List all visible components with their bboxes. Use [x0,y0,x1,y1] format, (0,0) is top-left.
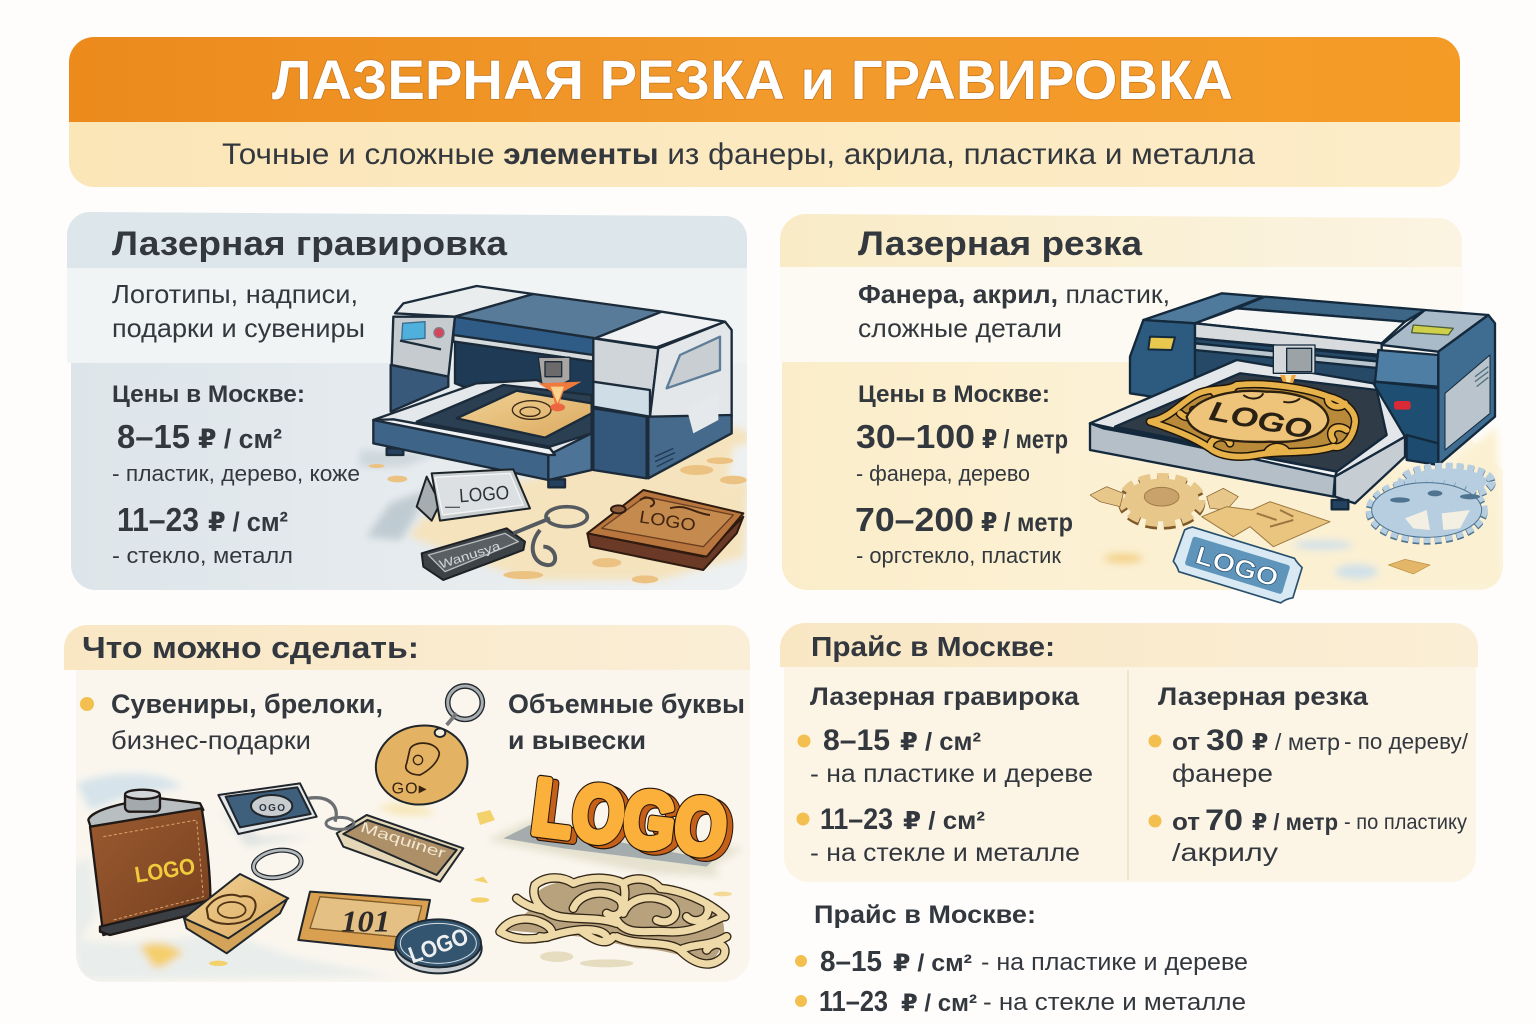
column: cutting: от [1172,729,1200,756]
panel: what can be made [64,625,750,982]
metal tag: LOGO [459,483,510,507]
summary line 1 [795,946,1248,978]
laser head [1273,345,1315,373]
wooden block [587,490,743,570]
price summary below [795,901,1248,1018]
price: glass, metal: ₽ / см² [208,507,288,537]
price: plywood: 30–100 [856,418,975,455]
illustration: souvenirs [63,686,495,980]
price: plastic, wood, leather [112,418,360,486]
price: acrylic: 70–200 [855,501,974,538]
illustration: 3D logo and ornament: LOGO [533,764,737,876]
carved ornament [500,878,727,964]
plate 101: 101 [341,905,390,939]
summary line 2 [795,986,1246,1018]
description [112,279,365,343]
summary line 1: - на пластике и дереве [981,949,1248,976]
list item: volume letters: и вывески [508,725,646,755]
wooden rectangular keychain [184,847,303,953]
column: cutting: от [1172,809,1200,836]
illustration: cutting machine and parts [1080,293,1503,606]
column: cutting: - по дереву/ [1344,729,1469,754]
dark tag keychain [218,783,336,834]
column: cutting: 70 [1205,804,1243,837]
price: plastic, wood, leather: ₽ / см² [198,424,282,454]
description: Логотипы, надписи, [112,279,358,309]
heading: Лазерная резка [858,225,1143,263]
description: Фанера, акрил, пластик, [858,279,1170,309]
column: engraving [796,683,1093,867]
column: cutting: /акрилу [1172,839,1279,867]
price: glass, metal: - стекло, металл [112,543,293,568]
table stains [360,427,751,580]
price: acrylic: - оргстекло, пластик [856,543,1061,568]
panel: laser cutting [780,214,1503,590]
list item: volume letters [508,689,745,755]
subtitle: Точные и сложные элементы из фанеры, акрила, пластика и металла [222,138,1255,171]
flask [88,790,210,935]
summary line 1: 8–15 [820,946,882,978]
price: plastic, wood, leather: 8–15 [117,418,190,455]
summary line 2: - на стекле и металле [983,989,1246,1016]
cut ornament: LOGO [1207,395,1314,445]
plate 101 [298,892,430,950]
blue acrylic gears [1369,467,1492,541]
column: engraving: - на пластике и дереве [810,760,1093,788]
wood chip [1388,559,1430,574]
dark tag keychain: OGO [259,803,285,814]
summary line 2: ₽ / см² [901,990,977,1017]
summary line 1: ₽ / см² [893,950,972,977]
column: engraving: ₽ / см² [903,807,985,835]
column: cutting [1148,683,1469,867]
prices label: Цены в Москве: [858,381,1050,408]
illustration: engraving machine and items [360,286,751,583]
column: engraving: 11–23 [820,803,893,836]
heading: Прайс в Москве: [811,631,1055,662]
price: glass, metal [112,501,293,568]
column: cutting: Лазерная резка [1158,683,1369,711]
shadow [487,820,743,877]
round dark token: LOGO [405,923,472,968]
blue LOGO badge: LOGO [1192,541,1282,593]
heading: Лазерная гравировка [112,225,508,263]
column: cutting: ₽ / метр [1252,729,1340,755]
machine [1090,293,1495,509]
3D letters depth: LOGO [533,764,737,876]
column: engraving: - на стекле и металле [810,839,1080,867]
price: glass, metal: 11–23 [117,501,199,538]
brown long tag [326,815,463,882]
column: engraving: Лазерная гравирока [810,683,1080,711]
price: plywood: ₽ / метр [982,424,1068,454]
background stains [63,774,437,980]
summary line 2: 11–23 [819,986,888,1018]
column: cutting: 30 [1206,724,1244,757]
prices label: Цены в Москве: [112,381,305,408]
3D letters face: LOGO [527,761,732,873]
price: plastic, wood, leather: - пластик, дерево, коже [112,461,360,486]
table stains [1080,427,1503,590]
header banner [69,37,1460,187]
cut ornament [1150,384,1355,457]
list item: souvenirs: бизнес-подарки [111,725,311,755]
dark keychain [422,507,587,580]
panel: price list Moscow [780,623,1478,882]
round wooden medal [370,686,482,812]
column: engraving: ₽ / см² [900,728,981,756]
panel: laser engraving [67,212,747,590]
round wooden medal: GO▸ [392,780,427,797]
3D letters outline: LOGO [527,761,732,873]
brown long tag: Maquiner [358,820,448,862]
list item: volume letters: Объемные буквы [508,689,745,719]
list item: souvenirs [80,689,383,755]
description: подарки и сувениры [112,313,365,343]
column: cutting: фанере [1172,760,1273,788]
summary heading: Прайс в Москве: [814,901,1036,929]
column: engraving: 8–15 [823,724,890,757]
description: сложные детали [858,313,1062,343]
title: ЛАЗЕРНАЯ РЕЗКА и ГРАВИРОВКА [272,48,1233,111]
list item: souvenirs: Сувениры, брелоки, [111,689,383,719]
dark keychain: Wanusya [437,539,502,572]
illustration: 3D logo and ornament [487,761,743,967]
price: plywood [856,418,1068,486]
machine [373,286,732,487]
column: cutting: ₽ / метр [1252,809,1338,835]
price: acrylic: ₽ / метр [981,507,1073,537]
wooden block: LOGO [638,506,697,535]
wooden gears and scraps [1090,477,1330,547]
blue LOGO badge [1171,525,1304,606]
price: plywood: - фанера, дерево [856,461,1030,486]
description [858,279,1170,343]
metal tag [417,469,530,521]
heading: Что можно сделать: [82,630,419,665]
flask: LOGO [133,853,197,888]
price: acrylic [855,501,1073,568]
column: cutting: - по пластику [1344,811,1467,834]
